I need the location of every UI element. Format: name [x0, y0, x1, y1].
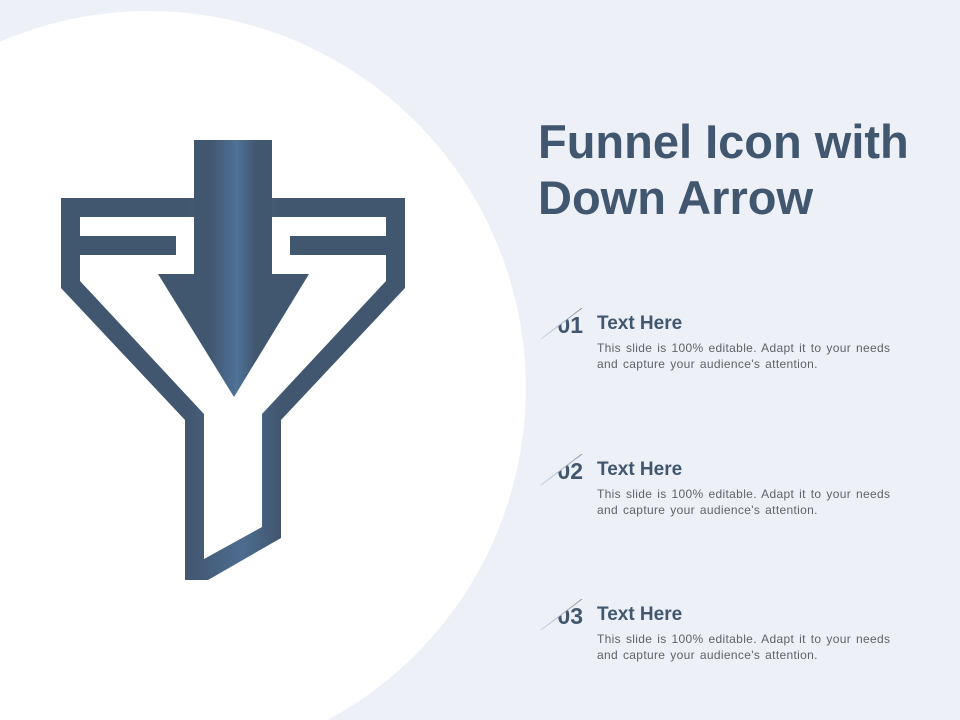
number 01: 01 [557, 312, 583, 338]
heading 03: Text Here [597, 604, 682, 625]
number 03: 03 [557, 603, 583, 629]
slash accent 01 [540, 308, 582, 340]
body 03 [597, 632, 890, 662]
title: Funnel Icon with [538, 115, 909, 168]
down arrow [158, 140, 309, 397]
title [538, 115, 909, 224]
body 02 [597, 487, 890, 517]
body 02: and capture your audience's attention. [597, 503, 818, 517]
body 03: and capture your audience's attention. [597, 648, 818, 662]
heading 02: Text Here [597, 459, 682, 480]
body 02: This slide is 100% editable. Adapt it to your needs [597, 487, 890, 501]
body 01: This slide is 100% editable. Adapt it to your needs [597, 341, 890, 355]
item 02 [540, 454, 890, 517]
heading 01: Text Here [597, 313, 682, 334]
item 03 [540, 599, 890, 662]
slash accent 02 [540, 454, 582, 486]
number 02: 02 [557, 458, 583, 484]
funnel left bar [70, 236, 176, 255]
funnel outline [61, 198, 405, 580]
slash accent 03 [540, 599, 582, 630]
funnel right bar [290, 236, 396, 255]
body 01 [597, 341, 890, 371]
body 01: and capture your audience's attention. [597, 357, 818, 371]
body 03: This slide is 100% editable. Adapt it to your needs [597, 632, 890, 646]
item 01 [540, 308, 890, 371]
title: Down Arrow [538, 171, 813, 224]
